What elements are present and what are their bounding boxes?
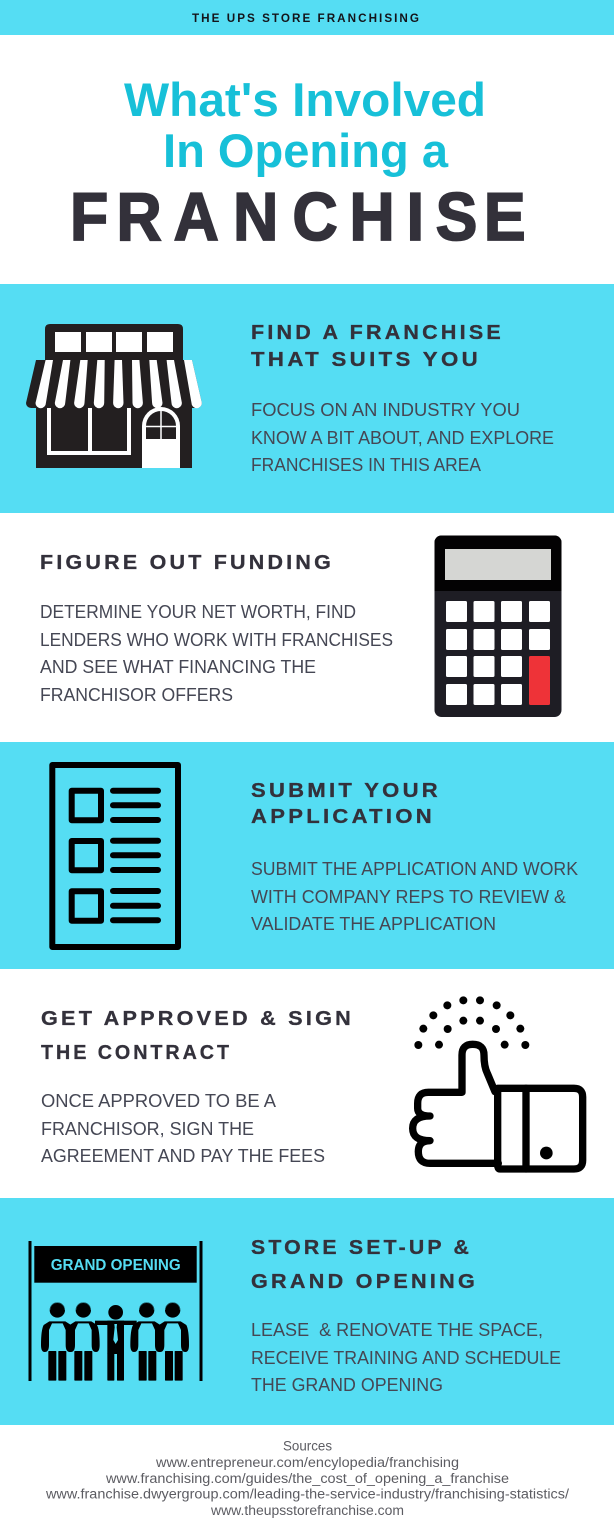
icon: storefront [26, 324, 202, 468]
sources: Sources [283, 1438, 332, 1454]
staff figures [41, 1302, 189, 1381]
title line 1: What's Involved [124, 74, 486, 127]
panel: submit your application [0, 742, 614, 969]
header text: THE UPS STORE FRANCHISING [192, 13, 421, 25]
body text: AND SEE WHAT FINANCING THE [40, 656, 316, 677]
heading: FIND A FRANCHISE [251, 322, 504, 344]
heading [41, 1008, 354, 1064]
body text: FOCUS ON AN INDUSTRY YOU [251, 399, 520, 420]
body text [251, 858, 579, 934]
body text: SUBMIT THE APPLICATION AND WORK [251, 858, 579, 879]
body text: RECEIVE TRAINING AND SCHEDULE [251, 1347, 561, 1368]
body text: LENDERS WHO WORK WITH FRANCHISES [40, 629, 393, 650]
sources: www.theupsstorefranchise.com [210, 1503, 404, 1518]
body text: DETERMINE YOUR NET WORTH, FIND [40, 601, 356, 622]
heading: THAT SUITS YOU [251, 349, 481, 371]
body text: ONCE APPROVED TO BE A [41, 1090, 277, 1111]
body text: LEASE & RENOVATE THE SPACE, [251, 1319, 543, 1340]
icon: application form [52, 765, 178, 947]
title line 2: In Opening a [163, 125, 449, 178]
heading: SUBMIT YOUR [251, 780, 441, 802]
body text [40, 601, 393, 705]
body text: FRANCHISOR OFFERS [40, 684, 233, 705]
header bar [0, 0, 614, 35]
banner text: GRAND OPENING [51, 1257, 181, 1274]
body text: THE GRAND OPENING [251, 1374, 443, 1395]
body text: FRANCHISES IN THIS AREA [251, 454, 482, 475]
heading: FIGURE OUT FUNDING [40, 552, 334, 574]
body text [251, 399, 554, 475]
heading [251, 1237, 478, 1293]
panel: figure out funding [40, 536, 562, 717]
body text: WITH COMPANY REPS TO REVIEW & [251, 886, 567, 907]
title line 3: FRANCHISE [70, 179, 526, 255]
title [70, 74, 526, 255]
heading: APPLICATION [251, 806, 435, 828]
body text [251, 1319, 561, 1395]
sources: www.franchising.com/guides/the_cost_of_opening_a_franchise [105, 1471, 509, 1486]
heading [251, 322, 504, 371]
panel: find a franchise [0, 284, 614, 513]
sources [45, 1438, 569, 1518]
heading: GRAND OPENING [251, 1271, 478, 1293]
icon: grand opening banner and staff [28, 1241, 202, 1381]
heading: THE CONTRACT [41, 1042, 232, 1064]
body text: KNOW A BIT ABOUT, AND EXPLORE [251, 427, 554, 448]
icon: calculator [434, 536, 562, 717]
icon: thumbs up with sparkle dots [413, 996, 583, 1169]
heading [251, 780, 441, 828]
heading: GET APPROVED & SIGN [41, 1008, 354, 1030]
body text: FRANCHISOR, SIGN THE [41, 1118, 254, 1139]
panel: get approved and sign [41, 996, 583, 1169]
body text: VALIDATE THE APPLICATION [251, 913, 496, 934]
body text: AGREEMENT AND PAY THE FEES [41, 1145, 325, 1166]
panel: store set-up and grand opening [0, 1198, 614, 1425]
sources: www.franchise.dwyergroup.com/leading-the-service-industry/franchising-statistics/ [45, 1486, 569, 1502]
body text [41, 1090, 325, 1166]
heading: STORE SET-UP & [251, 1237, 472, 1259]
sources: www.entrepreneur.com/encylopedia/franchising [155, 1455, 459, 1470]
